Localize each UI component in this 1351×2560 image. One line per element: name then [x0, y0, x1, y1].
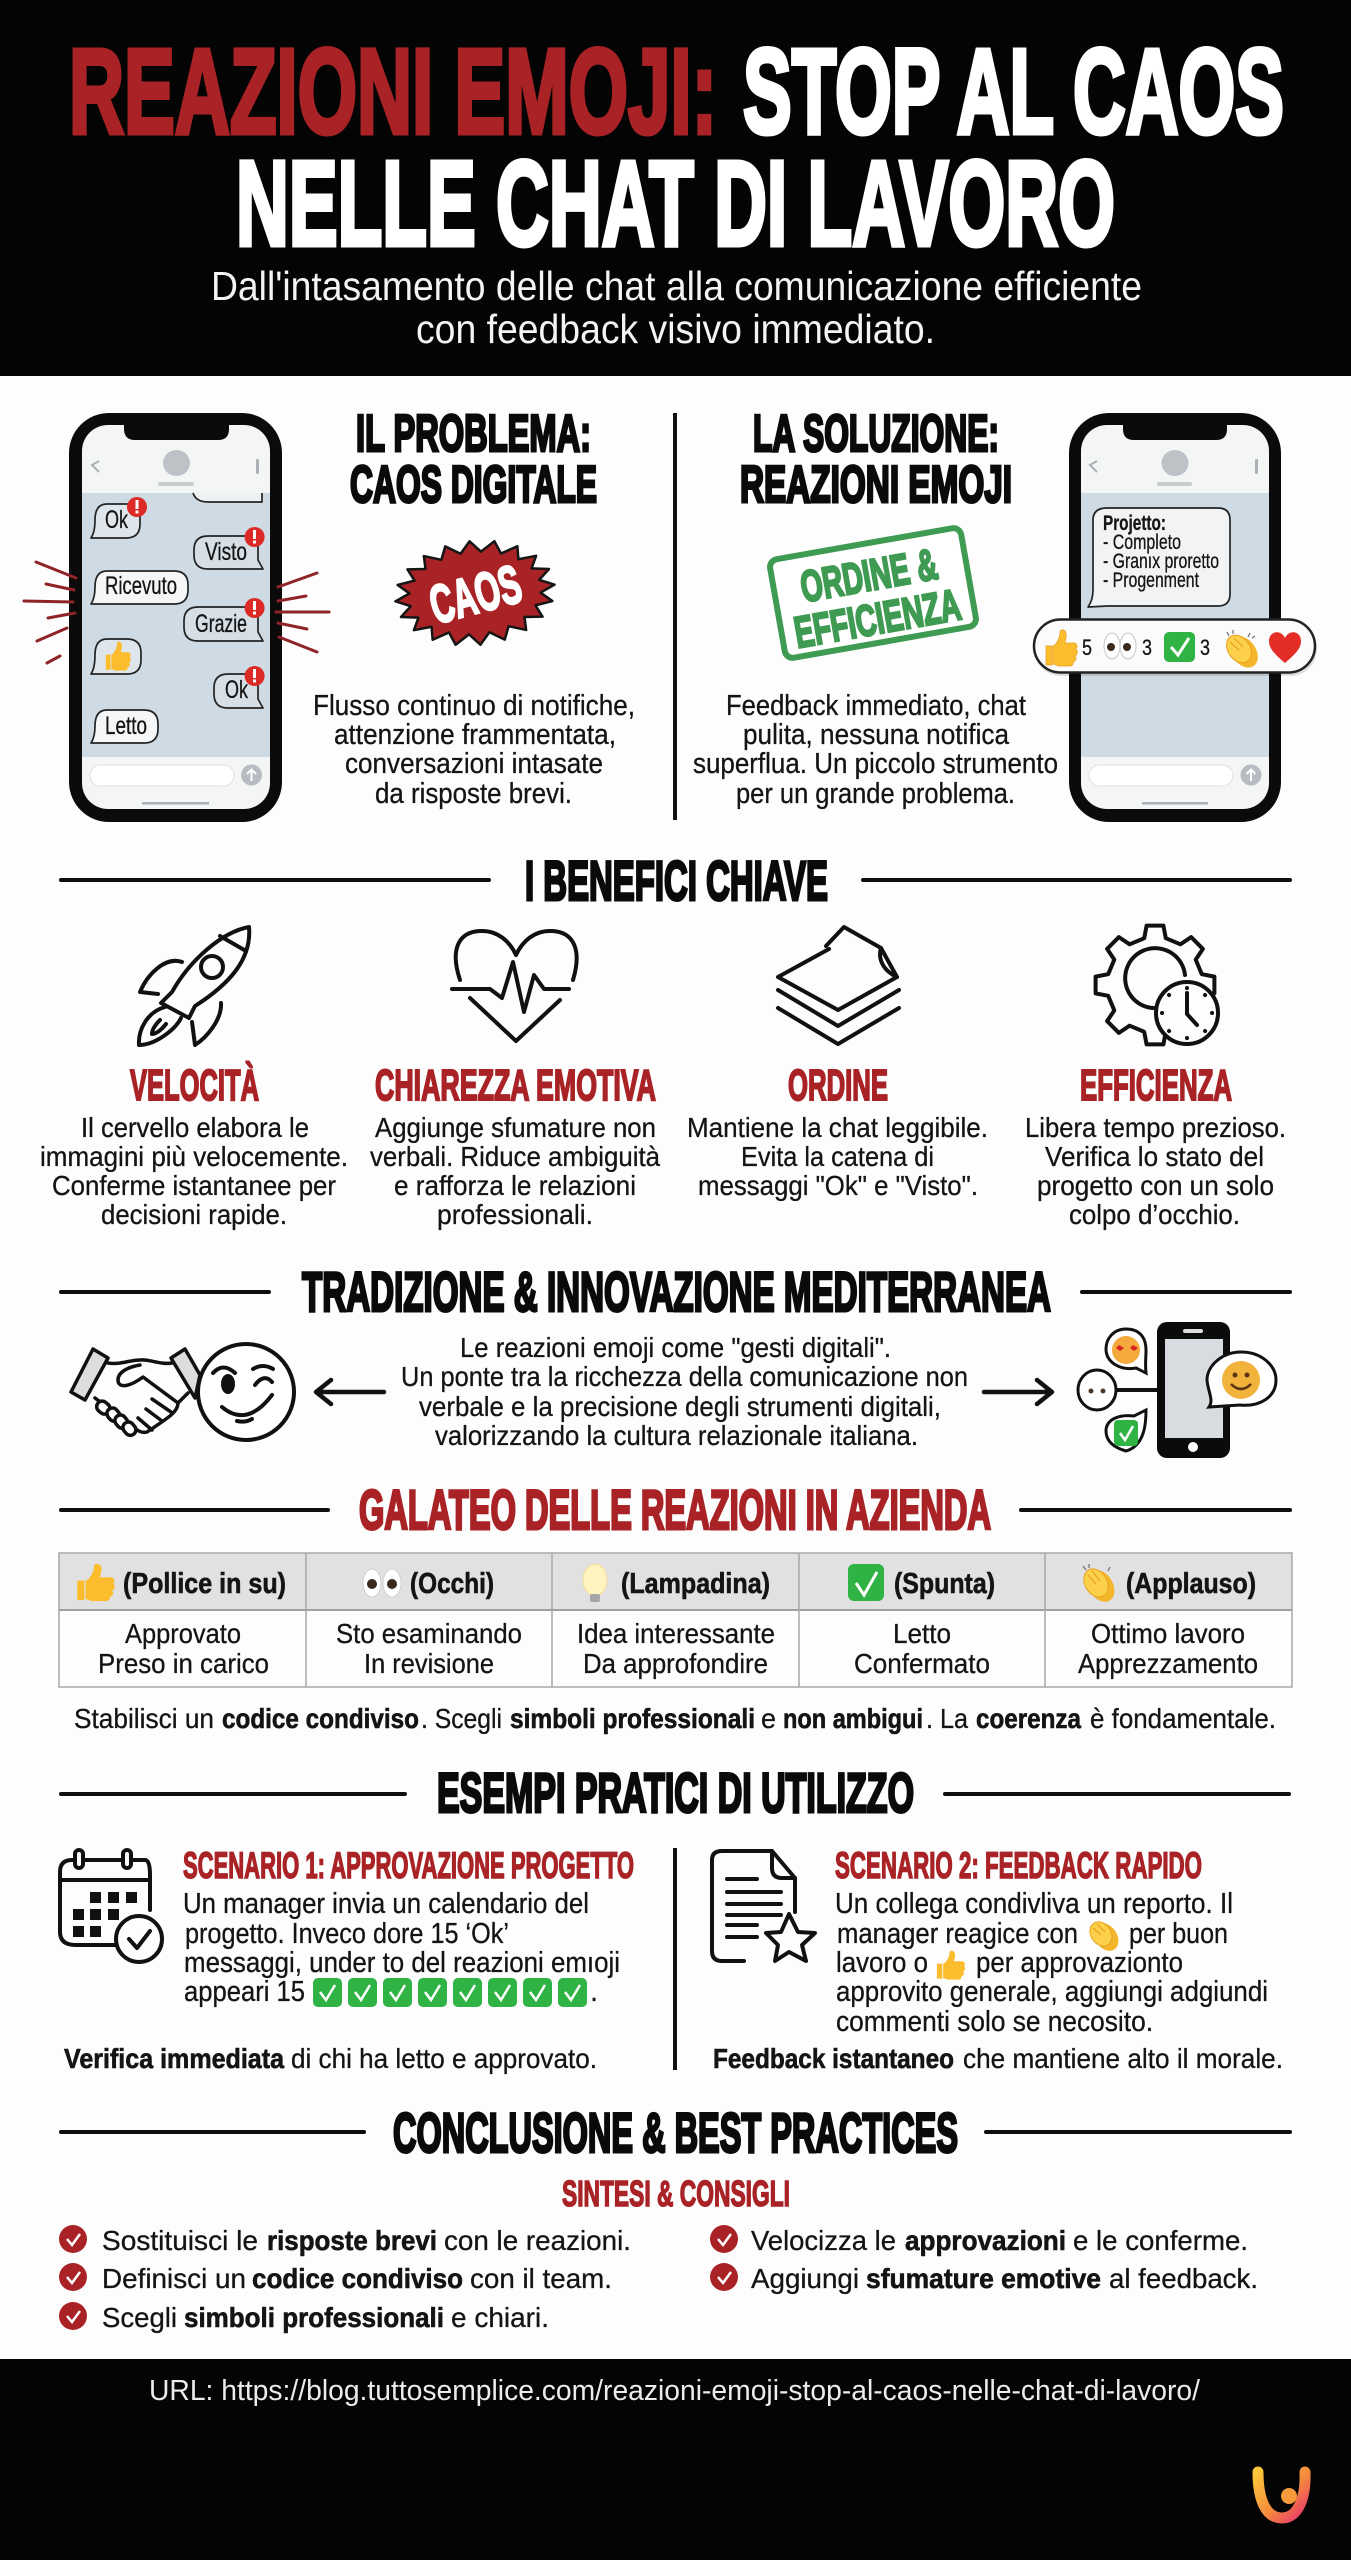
column: occhi: Sto esaminando	[336, 1618, 522, 1649]
result: scenario 2	[713, 2043, 1283, 2074]
list: consigli destra: al feedback.	[1109, 2263, 1258, 2294]
bubble: Ok 2	[214, 666, 265, 708]
panel: problem phone	[69, 413, 282, 822]
scenario 1: appeari 15	[184, 1976, 305, 2008]
benefit: chiarezza emotiva: Aggiunge sfumature non	[375, 1112, 656, 1143]
subtitle	[211, 263, 1142, 352]
benefit: ordine: Mantiene la chat leggibile.	[687, 1112, 988, 1143]
column: lampadina: Da approfondire	[583, 1648, 768, 1679]
scenario 1	[183, 1845, 634, 2008]
note: codice condiviso	[74, 1703, 1276, 1734]
scenario 1: SCENARIO 1: APPROVAZIONE PROGETTO	[183, 1845, 634, 1886]
benefit: efficienza: Verifica lo stato del	[1045, 1141, 1264, 1172]
benefit: velocita: VELOCITÀ	[130, 1060, 259, 1110]
column: spunta: Letto	[893, 1618, 951, 1649]
list: consigli sinistra: Definisci un	[102, 2263, 246, 2294]
list: consigli sinistra: con il team.	[470, 2263, 612, 2294]
stamp: ordine ed efficienza	[769, 527, 977, 660]
bubble: Ricevuto	[91, 571, 188, 604]
icon: phone with reactions	[1078, 1322, 1276, 1458]
text: problema: da risposte brevi.	[375, 778, 572, 810]
benefit: velocita: Conferme istantanee per	[52, 1170, 336, 1201]
column: applauso: Apprezzamento	[1078, 1648, 1258, 1679]
benefit: ordine	[687, 1061, 988, 1201]
scenario 2: manager reagice con	[837, 1918, 1078, 1950]
benefit: velocita: immagini più velocemente.	[40, 1141, 348, 1172]
benefit: chiarezza emotiva	[370, 1061, 660, 1230]
column: spunta	[848, 1564, 995, 1679]
benefit: chiarezza emotiva: professionali.	[437, 1199, 593, 1230]
benefit: efficienza	[1025, 1061, 1286, 1230]
scenario 2: commenti solo se necosito.	[836, 2006, 1153, 2038]
scenario 2	[835, 1845, 1268, 2038]
heading: la soluzione: REAZIONI EMOJI	[740, 456, 1012, 514]
list: consigli sinistra: codice condiviso	[252, 2263, 463, 2294]
badge: caos	[390, 533, 560, 653]
bubble: Letto: Letto	[105, 712, 147, 740]
list: consigli destra: e le conferme.	[1073, 2225, 1248, 2256]
column: pollice: (Pollice in su)	[123, 1568, 286, 1600]
text: tradizione: Un ponte tra la ricchezza della comunicazione non	[401, 1361, 968, 1392]
column: applauso: (Applauso)	[1126, 1568, 1256, 1600]
column: applauso	[1078, 1564, 1258, 1679]
subtitle: Dall'intasamento delle chat alla comunicazione efficiente	[211, 263, 1142, 309]
scenario 1: Un manager invia un calendario del	[183, 1888, 589, 1920]
text: problema: attenzione frammentata,	[334, 719, 616, 751]
list: consigli destra: approvazioni	[905, 2225, 1066, 2256]
icon: handshake	[71, 1349, 200, 1438]
benefit: chiarezza emotiva: e rafforza le relazioni	[394, 1170, 636, 1201]
section heading: conclusione	[59, 2101, 1292, 2164]
bubble: Visto	[194, 527, 265, 569]
subtitle: con feedback visivo immediato.	[416, 306, 935, 352]
text: soluzione	[693, 690, 1058, 810]
badge: caos: CAOS	[423, 554, 528, 636]
column: occhi: In revisione	[364, 1648, 494, 1679]
scenario 1: messaggi, under to del reazioni emıoji	[184, 1947, 620, 1979]
bubble: Grazie	[184, 598, 265, 641]
benefit: efficienza: progetto con un solo	[1037, 1170, 1274, 1201]
reaction pill: 3	[1142, 635, 1152, 660]
section heading: benefici: I BENEFICI CHIAVE	[525, 849, 828, 912]
heading: il problema	[350, 405, 597, 514]
list: consigli sinistra: Sostituisci le	[102, 2225, 258, 2256]
bubble: Ricevuto: Ricevuto	[105, 572, 177, 600]
title	[69, 23, 1284, 271]
icon: rocket	[139, 927, 249, 1045]
scenario 1: .	[590, 1976, 598, 2008]
footer band	[0, 2359, 1351, 2560]
icon: winking smiley	[198, 1344, 294, 1440]
list: consigli sinistra: simboli professionali	[184, 2302, 444, 2333]
result: scenario 1: Verifica immediata	[64, 2043, 284, 2074]
column: pollice	[77, 1564, 286, 1679]
message bubble: Projetto:	[1103, 512, 1166, 535]
text: tradizione: Le reazioni emoji come "gesti digitali".	[460, 1332, 891, 1363]
logo	[1258, 2472, 1305, 2518]
scenario 1: progetto. Inveco dore 15 ‘Ok’	[185, 1918, 509, 1950]
benefit: chiarezza emotiva: verbali. Riduce ambiguità	[370, 1141, 660, 1172]
benefit: ordine: Evita la catena di	[741, 1141, 934, 1172]
scenario 2: lavoro o	[836, 1947, 928, 1979]
benefit: efficienza: Libera tempo prezioso.	[1025, 1112, 1286, 1143]
column: lampadina	[577, 1564, 775, 1679]
reaction pill: 3	[1200, 635, 1210, 660]
bubble: thumbs up	[91, 639, 141, 674]
benefit: velocita: Il cervello elabora le	[81, 1112, 309, 1143]
text: problema	[313, 690, 635, 810]
note: codice condiviso: e	[761, 1703, 776, 1734]
list: consigli sinistra: risposte brevi	[267, 2225, 437, 2256]
note: codice condiviso: codice condiviso	[222, 1703, 419, 1734]
benefit: efficienza: colpo d’occhio.	[1069, 1199, 1240, 1230]
icon: gear clock	[1096, 926, 1218, 1044]
note: codice condiviso: coerenza	[976, 1703, 1081, 1734]
icon: calendar	[60, 1850, 162, 1962]
message bubble: - Completo	[1103, 531, 1181, 554]
check marks	[313, 1978, 587, 2007]
message bubble: - Granıx proretto	[1103, 550, 1219, 573]
icon: clap	[1221, 630, 1264, 673]
emoji: thumbs up	[937, 1951, 965, 1980]
message bubble	[1088, 508, 1230, 607]
text: tradizione: valorizzando la cultura relazionale italiana.	[435, 1420, 918, 1451]
text: problema: conversazioni intasate	[345, 748, 603, 780]
subheading: sintesi: SINTESI & CONSIGLI	[562, 2173, 790, 2214]
note: codice condiviso: Stabilisci un	[74, 1703, 214, 1734]
icon: document star	[712, 1851, 815, 1961]
icon: heart pulse	[452, 931, 577, 1041]
result: scenario 1	[64, 2043, 597, 2074]
note: codice condiviso: . Scegli	[421, 1703, 502, 1734]
panel: solution phone	[1069, 413, 1281, 822]
scenario 2: per approvazionto	[976, 1947, 1183, 1979]
stamp: ordine ed efficienza: EFFICIENZA	[791, 580, 965, 658]
text: problema: Flusso continuo di notifiche,	[313, 690, 635, 722]
title: REAZIONI EMOJI:	[69, 23, 717, 159]
reaction pill	[1034, 620, 1317, 676]
section heading: benefici	[59, 849, 1292, 912]
text: tradizione	[401, 1332, 968, 1451]
header band	[0, 0, 1351, 376]
column: spunta: Confermato	[854, 1648, 990, 1679]
section heading: esempi	[59, 1761, 1291, 1824]
icon: thumbs up	[1046, 630, 1077, 666]
note: codice condiviso: simboli professionali	[510, 1703, 755, 1734]
column: lampadina: Idea interessante	[577, 1618, 775, 1649]
bubble: Grazie: Grazie	[195, 610, 247, 638]
text: tradizione: verbale e la precisione degli strumenti digitali,	[419, 1391, 941, 1422]
benefit: velocita: decisioni rapide.	[101, 1199, 287, 1230]
list: consigli sinistra	[59, 2225, 631, 2333]
section heading: conclusione: CONCLUSIONE & BEST PRACTICES	[393, 2101, 958, 2164]
benefit: chiarezza emotiva: CHIAREZZA EMOTIVA	[375, 1061, 656, 1110]
text: soluzione: pulita, nessuna notifica	[743, 719, 1010, 751]
benefit: ordine: messaggi "Ok" e "Visto".	[698, 1170, 978, 1201]
heading: il problema: IL PROBLEMA:	[356, 405, 591, 463]
column: lampadina: (Lampadina)	[621, 1568, 770, 1600]
bubble: Ok 2: Ok	[225, 676, 248, 704]
url: URL: https://blog.tuttosemplice.com/reazioni-emoji-stop-al-caos-nelle-chat-di-lavoro/	[149, 2375, 1201, 2407]
emoji: clap	[1085, 1918, 1124, 1956]
heading: la soluzione: LA SOLUZIONE:	[753, 405, 999, 463]
reaction pill: 5	[1082, 635, 1092, 660]
benefit: efficienza: EFFICIENZA	[1080, 1061, 1232, 1110]
bubble: Ok: Ok	[105, 506, 128, 534]
list: consigli sinistra: e chiari.	[451, 2302, 549, 2333]
table: galateo	[59, 1553, 1292, 1687]
list: consigli sinistra: Scegli	[102, 2302, 177, 2333]
section heading: esempi: ESEMPI PRATICI DI UTILIZZO	[437, 1761, 914, 1824]
column: pollice: Approvato	[125, 1618, 241, 1649]
scenario 2: per buon	[1129, 1918, 1228, 1950]
column: occhi	[336, 1568, 522, 1679]
list: consigli destra	[710, 2225, 1258, 2294]
column: pollice: Preso in carico	[98, 1648, 269, 1679]
heading: il problema: CAOS DIGITALE	[350, 456, 597, 514]
message bubble: - Progenment	[1103, 569, 1199, 592]
vibration lines	[24, 562, 329, 663]
icon: layers	[778, 927, 899, 1044]
icon: check	[1164, 632, 1195, 662]
arrow right	[984, 1380, 1052, 1404]
arrow left	[316, 1380, 384, 1404]
list: consigli sinistra: con le reazioni.	[444, 2225, 631, 2256]
icon: eyes	[1104, 633, 1136, 659]
column: spunta: (Spunta)	[894, 1568, 995, 1600]
result: scenario 2: Feedback istantaneo	[713, 2043, 954, 2074]
column: applauso: Ottimo lavoro	[1091, 1618, 1245, 1649]
scenario 2: Un collega condivliva un reporto. Il	[835, 1888, 1233, 1920]
benefit: velocita	[40, 1060, 348, 1230]
list: consigli destra: Aggiungi	[751, 2263, 859, 2294]
scenario 2: approvito generale, aggiungi adgiundi	[836, 1976, 1268, 2008]
column: occhi: (Occhi)	[410, 1568, 494, 1600]
bubble: Visto: Visto	[205, 538, 247, 566]
text: soluzione: superflua. Un piccolo strumento	[693, 748, 1058, 780]
icon: heart	[1269, 632, 1301, 663]
heading: la soluzione	[740, 405, 1012, 514]
list: consigli destra: sfumature emotive	[866, 2263, 1101, 2294]
stamp: ordine ed efficienza: ORDINE &	[797, 540, 941, 612]
note: codice condiviso: non ambigui	[783, 1703, 923, 1734]
bubble: Ok	[91, 497, 147, 538]
list: consigli destra: Velocizza le	[751, 2225, 896, 2256]
benefit: ordine: ORDINE	[788, 1061, 888, 1110]
note: codice condiviso: è fondamentale.	[1090, 1703, 1276, 1734]
bubble: Letto	[91, 710, 158, 743]
note: codice condiviso: . La	[926, 1703, 968, 1734]
result: scenario 1: di chi ha letto e approvato.	[291, 2043, 597, 2074]
text: soluzione: Feedback immediato, chat	[726, 690, 1026, 722]
text: soluzione: per un grande problema.	[736, 778, 1015, 810]
result: scenario 2: che mantiene alto il morale.	[963, 2043, 1283, 2074]
